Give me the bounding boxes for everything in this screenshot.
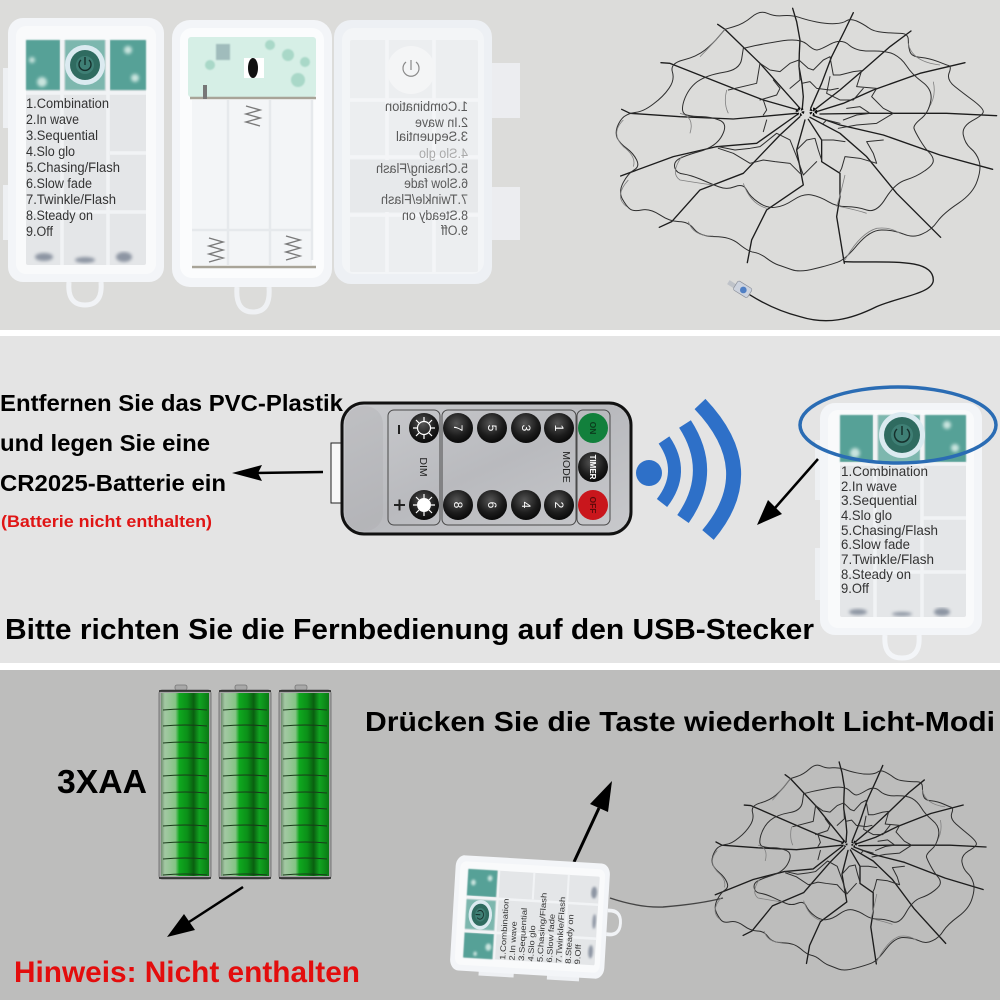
power and timer buttons: [578, 413, 608, 520]
mode list: 2.In wave: [26, 112, 79, 127]
small rotated battery box: 4.Slo glo: [526, 925, 537, 962]
mirrored mode list: 7.Twinkle/Flash: [381, 192, 468, 207]
dim buttons: DIM: [417, 457, 429, 477]
instruction text: remove PVC and insert battery: Entfernen Sie das PVC-Plastik: [0, 390, 343, 416]
mode list: [841, 463, 938, 596]
panel: top product photos: [0, 0, 1000, 330]
small rotated battery box: [449, 855, 624, 984]
mode list: 1.Combination: [841, 463, 928, 479]
power and timer buttons: ON: [588, 422, 598, 434]
label: 3XAA: 3XAA: [57, 763, 147, 800]
instruction text: remove PVC and insert battery: [0, 390, 343, 531]
mirrored mode list: 1.Combination: [385, 99, 468, 114]
mode list: [26, 96, 120, 239]
mirrored mode list: 4.Slo glo: [419, 146, 468, 161]
small rotated battery box: 7.Twinkle/Flash: [554, 896, 567, 963]
arrow to box: [757, 459, 818, 525]
mode list: 3.Sequential: [26, 128, 98, 143]
mode buttons: 4: [519, 502, 533, 509]
power and timer buttons: OFF: [588, 496, 598, 514]
mode list: 5.Chasing/Flash: [841, 522, 938, 538]
small rotated battery box: 8.Steady on: [564, 914, 575, 964]
mode buttons: 5: [485, 425, 499, 432]
mirrored mode list: 6.Slow fade: [404, 176, 468, 191]
mode list: 8.Steady on: [841, 566, 911, 582]
small rotated battery box: 5.Chasing/Flash: [536, 892, 548, 962]
mode list: 8.Steady on: [26, 208, 93, 223]
remote control: [331, 403, 631, 534]
panel: remote instructions: [0, 336, 1000, 663]
arrow to remote battery tab: [232, 465, 323, 481]
mode buttons: 2: [552, 502, 566, 509]
arrow up from box: [574, 781, 612, 862]
mode buttons: 3: [519, 425, 533, 432]
small rotated battery box: 1.Combination: [498, 898, 511, 960]
panel: battery and modes: [0, 670, 1000, 1000]
battery box front with mode list: [3, 18, 164, 305]
mode list: 9.Off: [26, 224, 53, 239]
mode list: 7.Twinkle/Flash: [841, 551, 934, 567]
wireless signal icon: [636, 404, 734, 535]
battery box open interior: [172, 20, 332, 312]
small rotated battery box: 9.Off: [573, 944, 583, 965]
circuit board: [188, 37, 316, 97]
battery box with highlighted button: [800, 387, 996, 658]
mode buttons: [443, 413, 574, 520]
small rotated battery box: 6.Slow fade: [545, 914, 557, 963]
mirrored mode list: 9.Off: [441, 223, 468, 238]
small rotated battery box: 3.Sequential: [517, 908, 529, 961]
mirrored mode list: 5.Chasing/Flash: [376, 161, 468, 176]
mode list: 6.Slow fade: [26, 176, 92, 191]
USB plug with cable: [727, 262, 933, 321]
mode buttons: 6: [485, 502, 499, 509]
mode list: 2.In wave: [841, 478, 897, 494]
mode list: 5.Chasing/Flash: [26, 160, 120, 175]
mode list: 4.Slo glo: [26, 144, 75, 159]
instruction text: remove PVC and insert battery: und legen Sie eine: [0, 430, 210, 456]
power icon: [403, 60, 419, 76]
heading: press button for light modes: Drücken Sie die Taste wiederholt Licht-Modi: [365, 706, 995, 737]
arrow to note: [167, 887, 243, 937]
spider web small bottom: [712, 762, 986, 970]
mode list: 4.Slo glo: [841, 507, 892, 523]
spider web light top: [616, 8, 997, 321]
springs: [209, 106, 300, 262]
mode buttons: 7: [451, 425, 465, 432]
mode list: 6.Slow fade: [841, 536, 910, 552]
mode list: 3.Sequential: [841, 492, 917, 508]
mirrored mode list: [376, 99, 468, 238]
small rotated battery box: 2.In wave: [508, 921, 519, 961]
mode buttons: 8: [451, 502, 465, 509]
dim buttons: [394, 413, 439, 520]
mode list: 1.Combination: [26, 96, 109, 111]
note: not included: Hinweis: Nicht enthalten: [14, 956, 360, 989]
mode buttons: 1: [552, 425, 566, 432]
mode buttons: MODE: [560, 451, 572, 483]
mode list: 9.Off: [841, 580, 869, 596]
battery box lid mirrored: [334, 20, 520, 284]
cable from box to web: [610, 898, 723, 907]
mode list: 7.Twinkle/Flash: [26, 192, 116, 207]
switch: [244, 58, 264, 78]
instruction text: remove PVC and insert battery: CR2025-Batterie ein: [0, 470, 226, 496]
power and timer buttons: TIMER: [588, 455, 597, 480]
mirrored mode list: 8.Steady on: [402, 208, 468, 223]
blue highlight ellipse: [800, 387, 996, 463]
three AA batteries: [159, 685, 331, 879]
mirrored mode list: 2.In wave: [415, 115, 468, 130]
note: battery not included: (Batterie nicht enthalten): [1, 513, 212, 531]
heading: point remote at USB plug: Bitte richten Sie die Fernbedienung auf den USB-Stecker: [5, 614, 814, 646]
mirrored mode list: 3.Sequential: [396, 129, 468, 144]
